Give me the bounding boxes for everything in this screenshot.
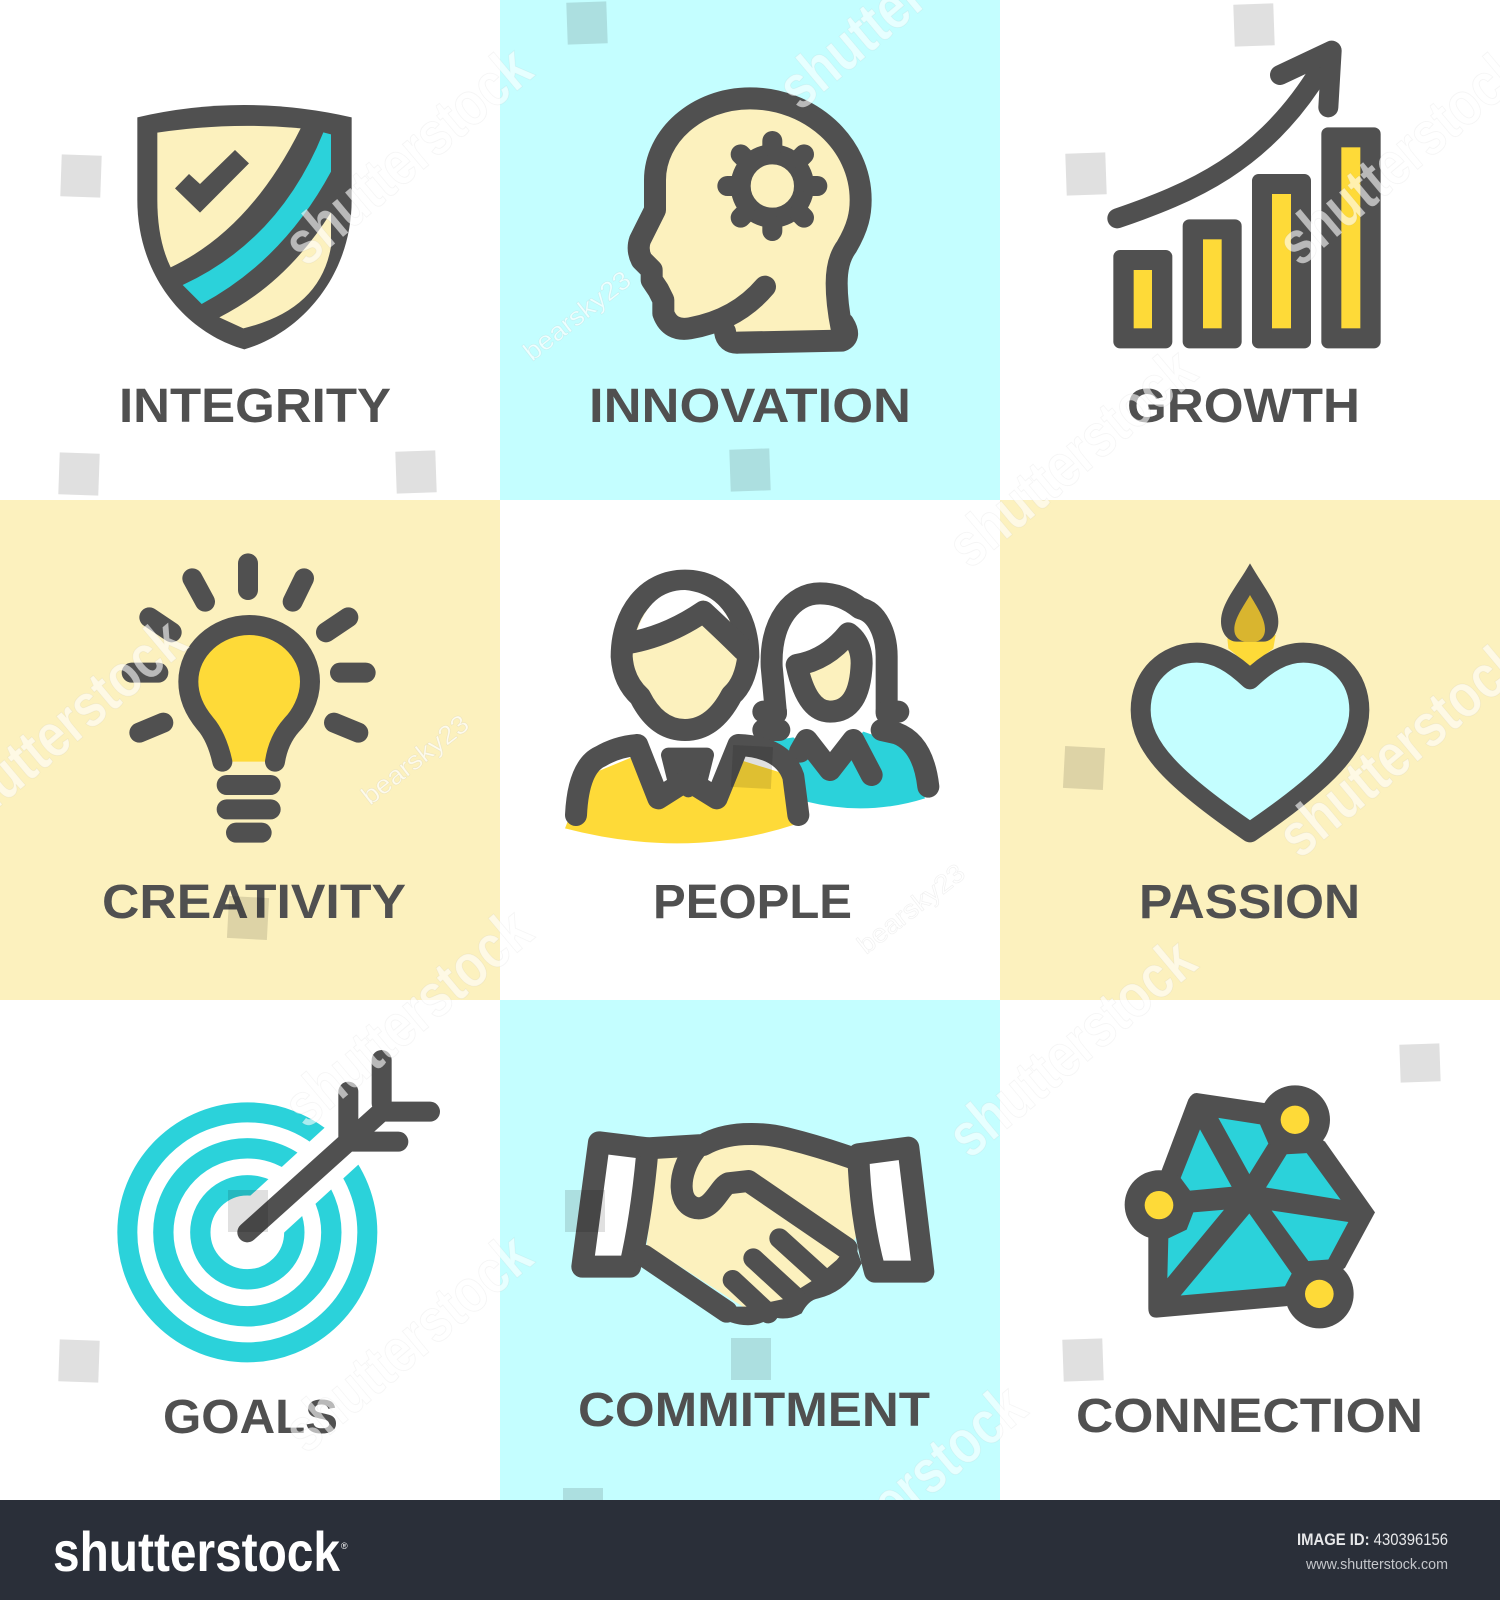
panel: goals	[0, 1000, 500, 1500]
panel: innovation	[500, 0, 1000, 500]
heading: people: PEOPLE	[653, 876, 852, 929]
registered mark: ®	[341, 1541, 348, 1551]
heading: innovation: INNOVATION	[589, 380, 911, 433]
icon: target with arrow	[127, 1060, 430, 1352]
icon: head with gear	[639, 98, 861, 343]
heading: growth: GROWTH	[1127, 380, 1360, 433]
panel: passion	[1000, 500, 1500, 1000]
icon detail: woman	[763, 593, 928, 808]
panel: creativity	[0, 500, 500, 1000]
panel: integrity	[0, 0, 500, 500]
text: shutterstock	[271, 1220, 545, 1466]
text: bearsky23	[517, 264, 637, 367]
footer bar	[0, 1500, 1500, 1600]
panel: connection	[1000, 1000, 1500, 1500]
website url: www.shutterstock.com	[1305, 1556, 1448, 1573]
icon: light bulb	[132, 563, 366, 833]
icon: man and woman	[565, 581, 928, 843]
text: bearsky23	[355, 708, 475, 811]
heading: integrity: INTEGRITY	[119, 380, 391, 433]
text: bearsky23	[851, 857, 971, 960]
panel: people	[500, 500, 1000, 1000]
icon: network gem	[1125, 1085, 1375, 1328]
icon: handshake	[582, 1134, 923, 1325]
icon: heart with flame	[1141, 563, 1359, 832]
image id: IMAGE ID: 430396156	[1297, 1531, 1448, 1549]
heading: passion: PASSION	[1139, 876, 1360, 929]
panel: commitment	[500, 1000, 1000, 1500]
text: shutterstock	[935, 335, 1209, 581]
panel: growth	[1000, 0, 1500, 500]
text: shutterstock	[935, 925, 1209, 1171]
icon: rising bar chart with arrow	[1113, 51, 1381, 348]
heading: creativity: CREATIVITY	[102, 876, 406, 929]
heading: goals: GOALS	[163, 1391, 338, 1444]
heading: connection: CONNECTION	[1076, 1390, 1423, 1443]
logo wordmark: shutterstock: shutterstock	[53, 1520, 341, 1583]
heading: commitment: COMMITMENT	[578, 1384, 930, 1437]
icon detail: gear	[727, 141, 817, 231]
text: shutterstock	[271, 895, 545, 1141]
icon: shield with check mark	[137, 105, 352, 349]
icon detail: man	[565, 581, 798, 843]
